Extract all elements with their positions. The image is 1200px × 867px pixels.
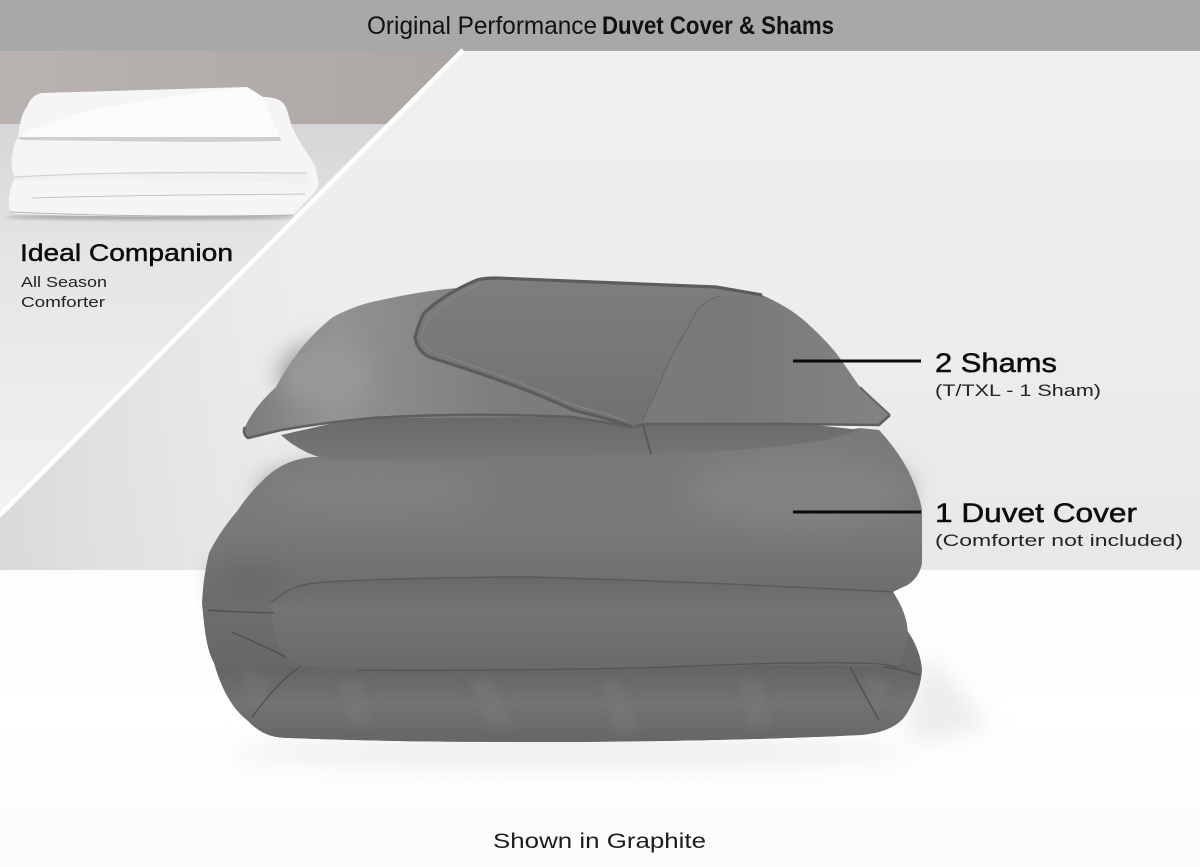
header title: Duvet Cover & Shams	[602, 12, 834, 40]
callout: 1 Duvet Cover: (Comforter not included)	[935, 531, 1183, 550]
product: folded duvet and pillow sham	[202, 278, 925, 745]
callout: 2 Shams	[793, 348, 1101, 400]
header title: Original Performance	[367, 12, 597, 40]
icon: folded white comforter	[5, 87, 318, 220]
heading: Ideal Companion: Ideal Companion	[20, 240, 233, 267]
callout: 1 Duvet Cover	[793, 498, 1183, 550]
duvet cover, upper fold	[202, 428, 922, 603]
callout: 2 Shams: 2 Shams	[935, 348, 1057, 378]
header bar	[0, 0, 1200, 51]
callout: 1 Duvet Cover: 1 Duvet Cover	[935, 498, 1137, 528]
pillow sham flap	[415, 278, 762, 427]
panel: ideal companion inset	[0, 50, 470, 524]
text: All Season Comforter: All Season	[21, 274, 107, 291]
duvet cover, lower roll	[202, 570, 925, 745]
caption: Shown in Graphite: Shown in Graphite	[493, 830, 706, 853]
callout: 2 Shams: (T/TXL - 1 Sham)	[935, 381, 1101, 400]
pillow sham	[244, 288, 890, 460]
text: All Season Comforter: Comforter	[21, 294, 105, 311]
text: All Season Comforter	[21, 276, 106, 307]
